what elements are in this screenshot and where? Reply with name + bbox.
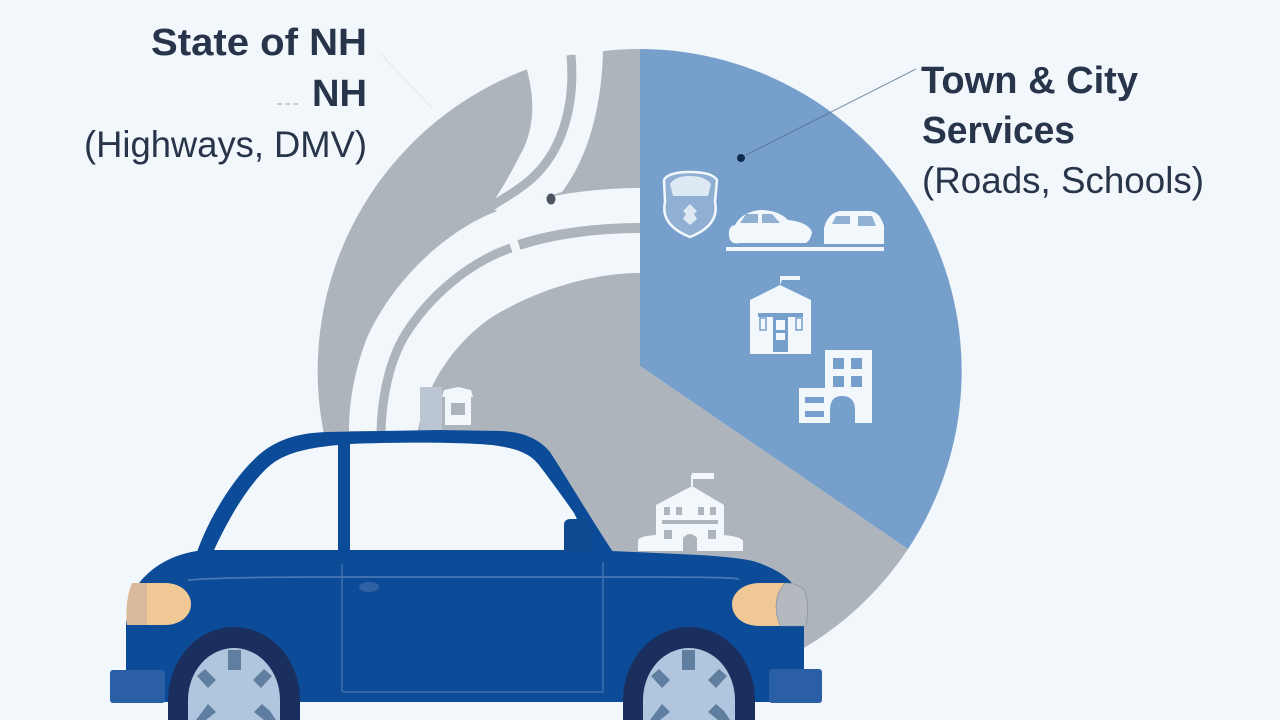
icon: small building behind car bbox=[420, 387, 473, 431]
pie segment: town and city services bbox=[640, 49, 962, 549]
label: Town and City Services: Town & City bbox=[921, 60, 1138, 102]
leader line: state bbox=[381, 54, 432, 108]
icon: police cars bbox=[726, 210, 884, 251]
car cabin bbox=[197, 430, 613, 552]
icon: police badge bbox=[664, 172, 717, 237]
icon: town hall bbox=[638, 473, 743, 551]
car door lines bbox=[188, 562, 739, 692]
car front wheel bbox=[168, 627, 300, 720]
leader line: town bbox=[746, 69, 916, 155]
car rear wheel bbox=[623, 627, 755, 720]
label: State of NH: NH bbox=[312, 73, 367, 115]
label: Town and City Services: (Roads, Schools) bbox=[922, 160, 1204, 201]
icon: school house bbox=[750, 276, 811, 354]
car mirror bbox=[564, 519, 593, 552]
label: State of NH: State of NH bbox=[151, 22, 367, 64]
car body bbox=[126, 551, 804, 702]
pie segment: state of NH bbox=[318, 49, 908, 693]
car bbox=[110, 430, 822, 720]
label: Town and City Services bbox=[921, 60, 1204, 201]
marker dot: state bbox=[546, 194, 556, 204]
label: State of NH bbox=[84, 22, 367, 165]
car windows bbox=[214, 443, 592, 550]
label: Town and City Services: Services bbox=[922, 110, 1075, 152]
car bumpers bbox=[110, 669, 822, 703]
car door handle bbox=[359, 582, 379, 592]
pie chart bbox=[318, 45, 962, 693]
label: State of NH: (Highways, DMV) bbox=[84, 124, 367, 165]
marker dot: town bbox=[737, 154, 745, 162]
car headlights bbox=[127, 583, 808, 626]
icon: office building bbox=[799, 350, 872, 423]
road illustration bbox=[349, 45, 640, 431]
